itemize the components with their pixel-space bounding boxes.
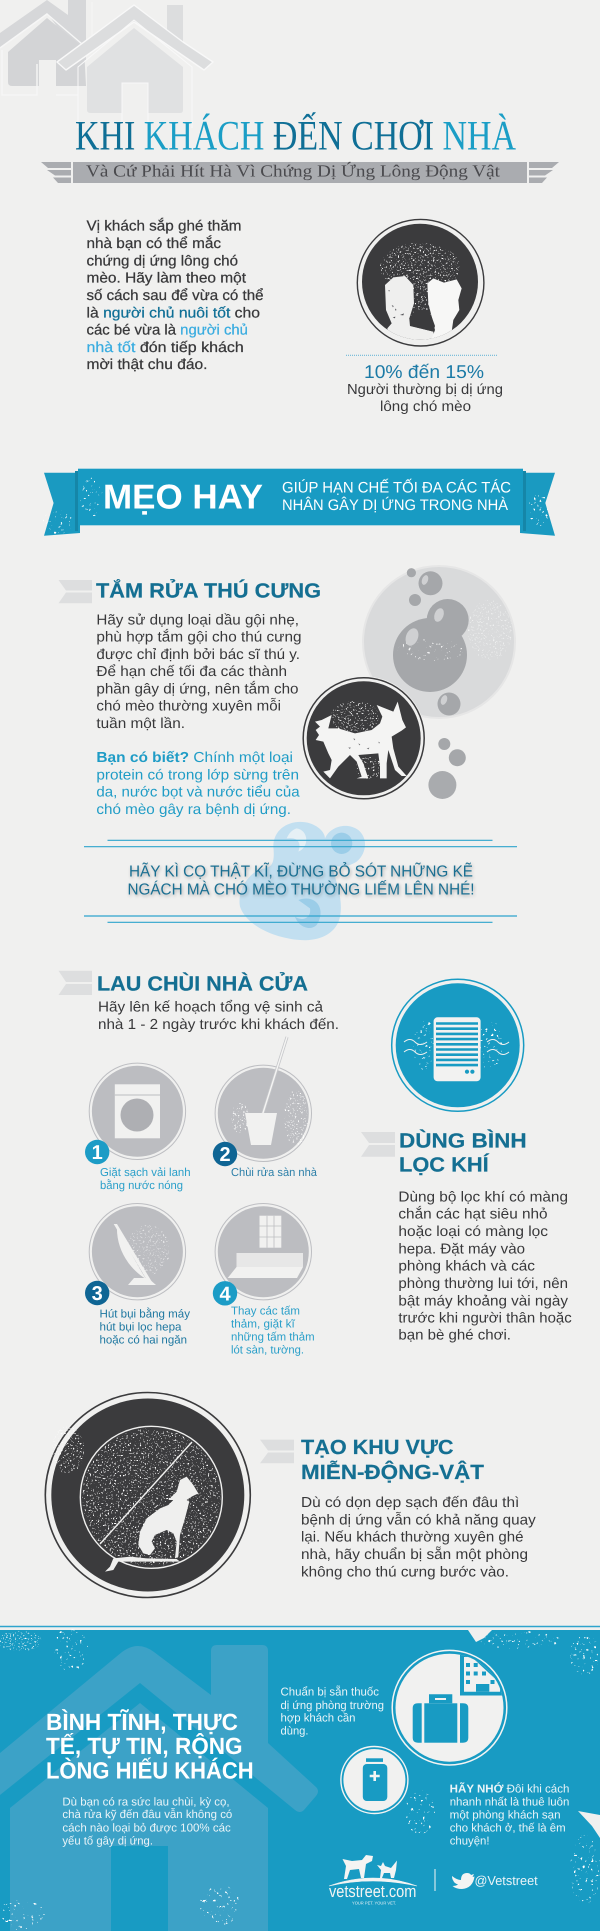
- text: air filter advice: bật máy khoảng vài ngày: [398, 1293, 569, 1309]
- heading: cleaning the house: LAU CHÙI NHÀ CỬA: [97, 972, 308, 996]
- divider: [434, 1869, 436, 1891]
- step 4: carpet and tiles: [213, 1204, 315, 1357]
- title: KHI KHÁCH ĐẾN CHƠI NHÀ: [75, 112, 517, 160]
- text: remember: một phòng khách sạn: [450, 1810, 561, 1822]
- text: cannot remove all allergens: cách nào loại bỏ được 100% các: [62, 1822, 231, 1834]
- logo: vetstreet: [329, 1855, 417, 1906]
- text: remember: chuyện!: [450, 1835, 490, 1847]
- logo: vetstreet: vetstreet.com: [329, 1882, 416, 1901]
- text: did you know: da, nước bọt và nước tiểu của: [96, 785, 301, 801]
- intro text: các bé vừa là người chủ: [86, 323, 248, 339]
- text: cleaning intro: [98, 1000, 339, 1033]
- icon: allergic people silhouettes: [357, 219, 484, 346]
- statistic: [346, 355, 503, 415]
- text: air filter advice: bạn bè ghé chơi.: [398, 1328, 511, 1344]
- text: prepare medicine: [280, 1686, 384, 1738]
- subtitle band: [41, 162, 559, 183]
- text: remember: [450, 1782, 569, 1847]
- chevron marker: air filter: [361, 1132, 395, 1157]
- text: air filter advice: hoặc loại có màng lọc: [398, 1224, 548, 1240]
- heading: use an air filter: [399, 1128, 527, 1177]
- text: pet-free zone advice: Dù có dọn dẹp sạch đến đâu thì: [301, 1495, 519, 1511]
- text: remember: nhanh nhất là thuê luôn: [450, 1796, 569, 1808]
- callout: scrub tip: [84, 840, 517, 922]
- ribbon: tips banner: [43, 469, 555, 536]
- icon: suitcase and hotel: [392, 1650, 510, 1765]
- text: bathing advice: tuần một lần.: [96, 716, 185, 732]
- icon: no animals sign: [45, 1392, 250, 1598]
- intro text: mèo. Hãy làm theo một: [86, 271, 246, 287]
- text: bathing advice: Hãy sử dụng loại dầu gội nhẹ,: [96, 612, 299, 628]
- subtitle band: Và Cứ Phải Hít Hà Vì Chứng Dị Ứng Lông Động Vật: [86, 162, 500, 181]
- text: cannot remove all allergens: Dù bạn có ra sức lau chùi, kỳ cọ,: [62, 1796, 230, 1808]
- text: pet-free zone advice: nhà, hãy chuẩn bị sẵn một phòng: [301, 1546, 528, 1563]
- step 4: carpet and tiles: thảm, giặt kĩ: [231, 1319, 296, 1331]
- step 3: vacuum cleaner: 3: [92, 1283, 103, 1305]
- step 4: carpet and tiles: những tấm thảm: [231, 1332, 315, 1344]
- intro text: chứng dị ứng lông chó: [86, 253, 238, 269]
- text: pet-free zone advice: [301, 1495, 536, 1580]
- text: air filter advice: chắn các hạt siêu nhỏ: [398, 1206, 548, 1223]
- ribbon: tips banner: GIÚP HẠN CHẾ TỐI ĐA CÁC TÁC: [282, 479, 511, 497]
- chevron marker: cleaning: [58, 971, 92, 995]
- panel: closing section: [0, 1626, 600, 1931]
- icon: medicine bottle: [341, 1746, 408, 1814]
- text: air filter advice: phòng thường lui tới, nên: [398, 1276, 568, 1292]
- intro text: mời thật chu đáo.: [86, 357, 208, 373]
- step 1: washing machine: [85, 1063, 191, 1192]
- statistic: 10% đến 15%: [364, 361, 484, 382]
- text: prepare medicine: hợp khách cần: [280, 1713, 356, 1725]
- text: cannot remove all allergens: [62, 1796, 232, 1847]
- step 1: washing machine: 1: [92, 1142, 103, 1164]
- chevron marker: bathing: [58, 580, 92, 603]
- text: did you know: [96, 750, 301, 818]
- text: did you know: chó mèo gây ra bệnh dị ứng.: [96, 802, 291, 818]
- step 2: mop and bucket: Chùi rửa sàn nhà: [231, 1167, 318, 1179]
- heading: pet-free zone: MIỄN-ĐỘNG-VẬT: [301, 1460, 485, 1484]
- ribbon: tips banner: MẸO HAY: [103, 478, 263, 516]
- statistic: Người thường bị dị ứng: [347, 382, 503, 398]
- step 4: carpet and tiles: 4: [219, 1283, 231, 1305]
- text: remember: HÃY NHỚ Đôi khi cách: [450, 1782, 569, 1796]
- decoration: torn edges: [468, 1630, 600, 1838]
- text: prepare medicine: dùng.: [280, 1726, 308, 1738]
- chevron marker: pet-free zone: [260, 1440, 294, 1463]
- text: air filter advice: hepa. Đặt máy vào: [398, 1241, 525, 1257]
- intro text: là người chủ nuôi tốt cho: [86, 305, 260, 321]
- statistic: lông chó mèo: [380, 399, 471, 415]
- step 3: vacuum cleaner: Hút bụi bằng máy: [100, 1308, 190, 1321]
- twitter handle: @Vetstreet: [474, 1873, 538, 1888]
- text: pet-free zone advice: không cho thú cưng bước vào.: [301, 1564, 509, 1580]
- intro text: [86, 218, 264, 373]
- step 4: carpet and tiles: Thay các tấm: [231, 1306, 300, 1318]
- icon: swirl: [239, 822, 365, 940]
- text: bathing advice: chó mèo thường xuyên mỗi: [96, 698, 281, 715]
- callout: scrub tip: HÃY KÌ CỌ THẬT KĨ, ĐỪNG BỎ SÓT NHỮNG KẼ: [130, 863, 474, 882]
- text: bathing advice: [96, 612, 302, 732]
- heading: stay calm: BÌNH TĨNH, THỰC: [46, 1709, 238, 1735]
- step 2: mop and bucket: [213, 1037, 318, 1179]
- step 3: vacuum cleaner: [85, 1204, 190, 1347]
- step 1: washing machine: Giặt sạch vải lanh: [100, 1167, 191, 1179]
- text: prepare medicine: Chuẩn bị sẵn thuốc: [280, 1686, 379, 1699]
- text: pet-free zone advice: lại. Nếu khách thường xuyên ghé: [301, 1530, 524, 1546]
- icon: twitter bird: [452, 1873, 474, 1889]
- ribbon: tips banner: NHÂN GÂY DỊ ỨNG TRONG NHÀ: [282, 496, 509, 514]
- text: bathing advice: được chỉ định bởi bác sĩ thú y.: [96, 647, 300, 663]
- icon: soap bubbles: [363, 566, 515, 799]
- callout: scrub tip: NGÁCH MÀ CHÓ MÈO THƯỜNG LIẾM LÊN NHÉ!: [128, 881, 476, 900]
- icon: dog in circle: [302, 676, 426, 800]
- heading: stay calm: [46, 1709, 254, 1784]
- logo: vetstreet: YOUR PET. YOUR VET.: [352, 1901, 396, 1906]
- heading: stay calm: LÒNG HIẾU KHÁCH: [46, 1757, 254, 1784]
- decoration: faded house: [0, 1645, 318, 1931]
- heading: stay calm: TẾ, TỰ TIN, RỘNG: [46, 1732, 243, 1759]
- text: cannot remove all allergens: yếu tố gây dị ứng.: [62, 1835, 153, 1847]
- step 3: vacuum cleaner: hút bụi lọc hepa: [100, 1322, 182, 1334]
- text: air filter advice: [398, 1190, 572, 1344]
- text: cleaning intro: nhà 1 - 2 ngày trước khi khách đến.: [98, 1017, 339, 1033]
- heading: use an air filter: DÙNG BÌNH: [399, 1128, 527, 1152]
- decoration: grunge specks: [0, 1628, 600, 1930]
- text: pet-free zone advice: bệnh dị ứng vẫn có khả năng quay: [301, 1511, 536, 1528]
- text: did you know: protein có trong lớp sừng trên: [96, 767, 299, 783]
- text: air filter advice: Dùng bộ lọc khí có màng: [398, 1190, 568, 1206]
- heading: bathing pets: TẮM RỬA THÚ CƯNG: [96, 578, 321, 602]
- text: cleaning intro: Hãy lên kế hoạch tổng vệ sinh cả: [98, 1000, 324, 1016]
- intro text: nhà tốt đón tiếp khách: [86, 340, 244, 356]
- heading: pet-free zone: TẠO KHU VỰC: [301, 1436, 454, 1459]
- step 2: mop and bucket: 2: [219, 1144, 231, 1166]
- icon: air purifier: [392, 979, 524, 1111]
- text: bathing advice: phần gây dị ứng, nên tắm cho: [96, 680, 299, 697]
- header houses decoration: [0, 0, 213, 128]
- callout: scrub tip: HÃY KÌ CỌ THẬT KĨ, ĐỪNG BỎ SÓT NHỮNG KẼ: [129, 862, 473, 881]
- step 3: vacuum cleaner: hoặc có hai ngăn: [100, 1335, 187, 1347]
- text: remember: cho khách ở, thế là êm: [450, 1822, 566, 1834]
- text: cannot remove all allergens: chà rửa kỹ đến đâu vẫn không có: [62, 1808, 232, 1821]
- heading: use an air filter: LỌC KHÍ: [399, 1153, 490, 1177]
- intro text: số cách sau để vừa có thể: [86, 288, 264, 304]
- text: air filter advice: phòng khách và các: [398, 1259, 535, 1275]
- intro text: Vị khách sắp ghé thăm: [86, 218, 242, 235]
- step 4: carpet and tiles: lót sàn, tường.: [231, 1345, 304, 1357]
- text: bathing advice: Để hạn chế tối đa các thành: [96, 664, 287, 680]
- text: did you know: Bạn có biết? Chính một loại: [96, 750, 293, 766]
- step 1: washing machine: bằng nước nóng: [100, 1179, 183, 1192]
- text: prepare medicine: dị ứng phòng trường: [280, 1700, 384, 1712]
- text: bathing advice: phù hợp tắm gội cho thú cưng: [96, 629, 302, 646]
- text: air filter advice: trước khi người thân hoặc: [398, 1310, 572, 1326]
- heading: pet-free zone: [301, 1436, 485, 1484]
- intro text: nhà bạn có thể mắc: [86, 235, 221, 252]
- callout: scrub tip: NGÁCH MÀ CHÓ MÈO THƯỜNG LIẾM LÊN NHÉ!: [128, 880, 474, 899]
